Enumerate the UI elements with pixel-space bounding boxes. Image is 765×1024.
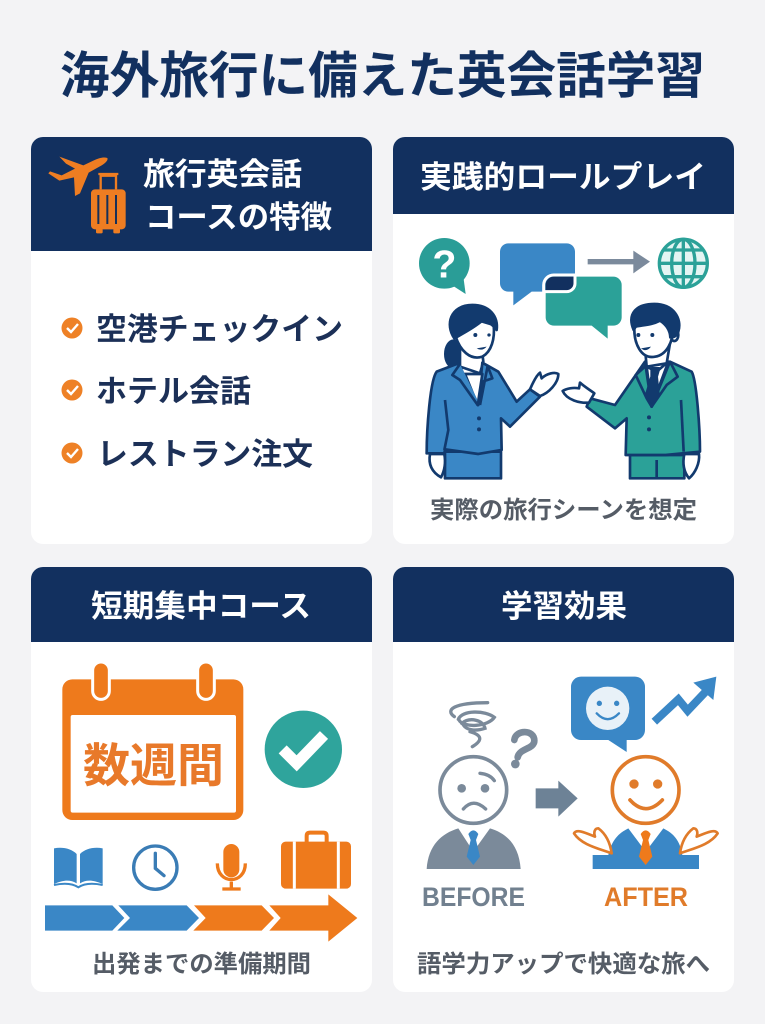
header text line 2: コースの特徴 bbox=[145, 200, 332, 235]
header: short intensive course bbox=[31, 567, 372, 642]
illustration: schedule bbox=[45, 662, 357, 942]
header: role play bbox=[393, 137, 734, 214]
icon: calendar bbox=[62, 662, 243, 820]
icon: question bubble bbox=[419, 238, 470, 294]
figure: after bbox=[574, 757, 718, 869]
icon: airplane and suitcase bbox=[48, 157, 126, 233]
list item: restaurant ordering: レストラン注文 bbox=[97, 437, 313, 472]
header text: short intensive course: 短期集中コース bbox=[91, 589, 311, 624]
icon: briefcase bbox=[281, 833, 351, 889]
label: after: AFTER bbox=[604, 882, 688, 912]
illustration: role play conversation bbox=[419, 238, 707, 478]
header text: learning effect: 学習効果 bbox=[501, 589, 627, 624]
figure: before bbox=[427, 703, 534, 869]
figure: woman bbox=[427, 305, 558, 478]
arrow: before to after bbox=[536, 781, 578, 817]
title: 海外旅行に備えた英会話学習 bbox=[60, 48, 705, 104]
icon: question bubble: ? bbox=[432, 243, 456, 287]
panel: short intensive course bbox=[31, 567, 372, 992]
caption: role play: 実際の旅行シーンを想定 bbox=[430, 497, 697, 524]
header: learning effect bbox=[393, 567, 734, 642]
list item: hotel conversation: ホテル会話 bbox=[96, 374, 251, 409]
icon: globe bbox=[659, 239, 707, 287]
header: course features bbox=[31, 137, 372, 251]
icon: book bbox=[54, 848, 103, 887]
bubble overlap bbox=[546, 277, 575, 292]
icon: microphone bbox=[217, 844, 245, 889]
header text: role play: 実践的ロールプレイ bbox=[420, 160, 706, 195]
panel: role play bbox=[393, 137, 734, 544]
caption: short intensive course: 出発までの準備期間 bbox=[92, 951, 311, 978]
icon: clock bbox=[134, 846, 177, 889]
list item: airport check-in: 空港チェックイン bbox=[96, 312, 343, 347]
figure: man bbox=[563, 304, 700, 478]
icon: teal speech bubble bbox=[546, 277, 622, 339]
panel: learning effect bbox=[393, 567, 734, 992]
caption: learning effect: 語学力アップで快適な旅へ bbox=[417, 951, 710, 978]
icon: blue speech bubble bbox=[500, 243, 575, 305]
icon: smile speech bubble bbox=[571, 677, 645, 752]
arrow: progress timeline bbox=[45, 894, 357, 942]
icon: rising arrow bbox=[654, 677, 716, 722]
panel: course features bbox=[31, 137, 372, 544]
header text: course features: 旅行英会話 bbox=[143, 157, 302, 192]
arrow bbox=[588, 251, 650, 273]
label: before: BEFORE bbox=[422, 882, 525, 912]
illustration: before and after bbox=[427, 677, 718, 869]
calendar text: 数週間 bbox=[83, 740, 224, 792]
icon: check circle bbox=[265, 711, 342, 788]
